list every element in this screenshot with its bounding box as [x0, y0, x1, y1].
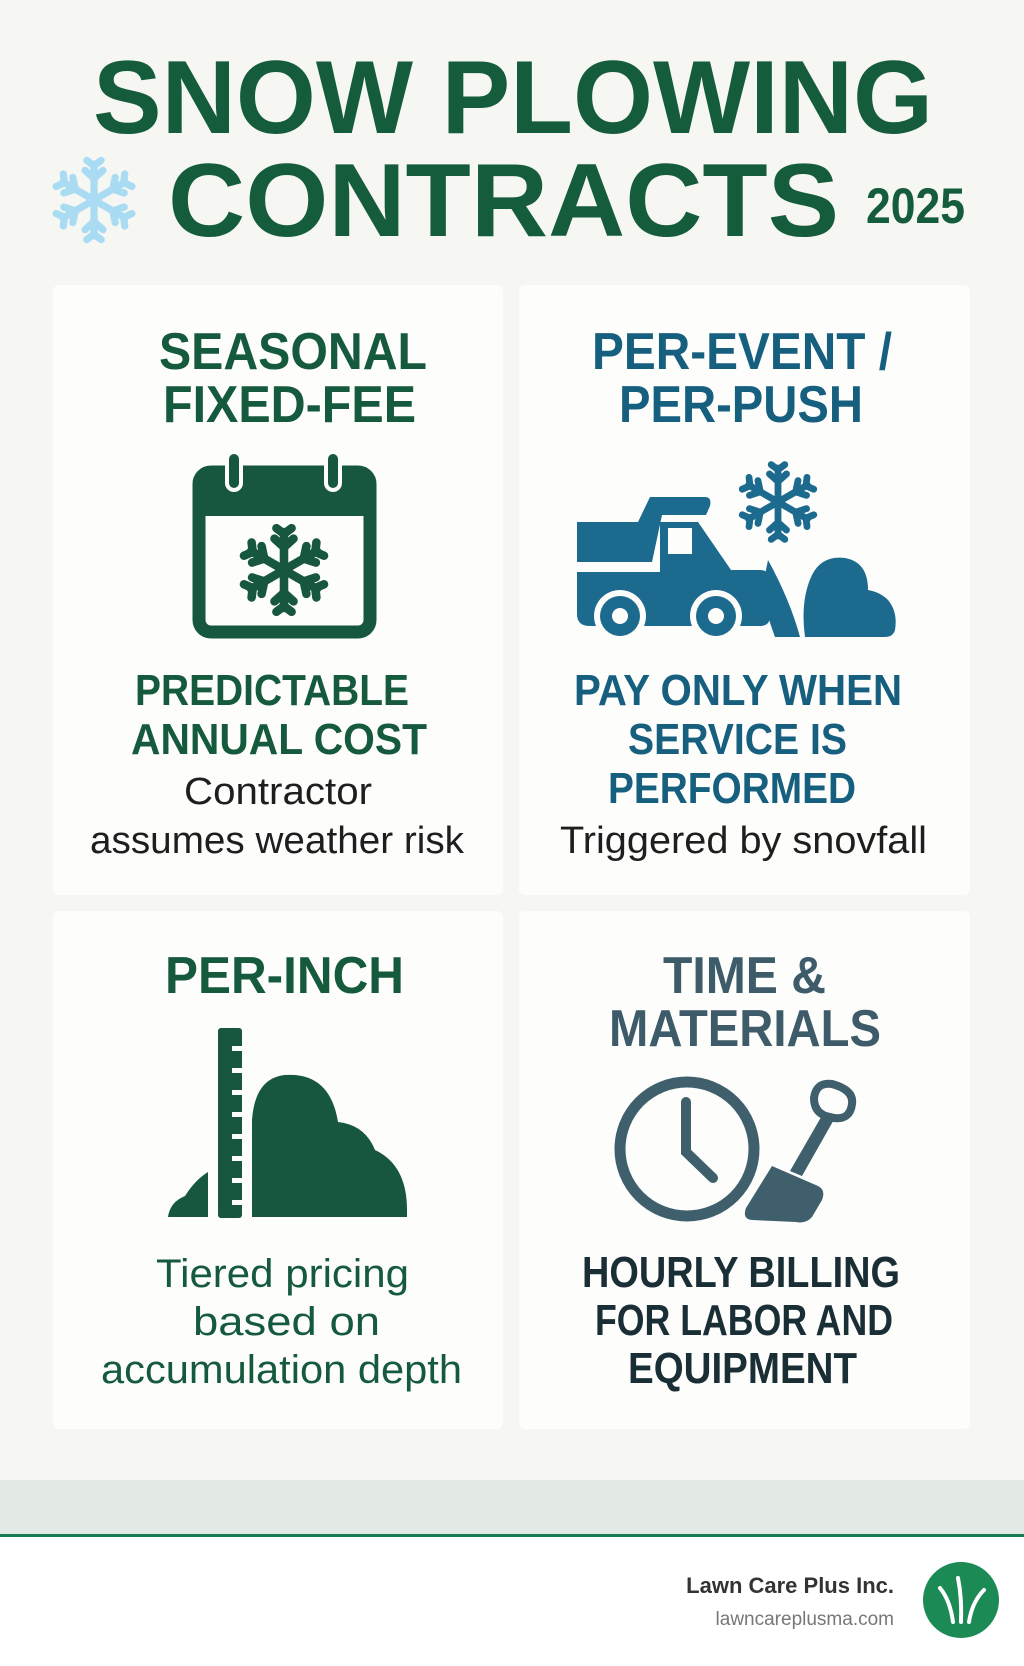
text block: PERFORMED — [608, 764, 856, 813]
heading — [609, 947, 881, 1058]
panel: seasonal fixed-fee: Contractor — [184, 771, 372, 813]
text block: HOURLY BILLING — [582, 1248, 900, 1297]
text block: accumulation depth — [101, 1348, 462, 1392]
title: 2025 — [866, 178, 965, 234]
panel: seasonal fixed-fee — [53, 285, 503, 895]
text block: FOR LABOR AND — [595, 1296, 893, 1345]
footer: company text — [686, 1573, 894, 1630]
heading: TIME & — [663, 947, 826, 1005]
heading: MATERIALS — [609, 1000, 881, 1058]
heading: FIXED-FEE — [163, 376, 416, 434]
logo — [923, 1562, 999, 1638]
heading: SEASONAL — [159, 323, 427, 381]
panel: per-event: Triggered by snovfall — [560, 820, 927, 862]
icon: title snowflake — [55, 160, 133, 240]
text block — [131, 666, 427, 764]
text block: SERVICE IS — [628, 715, 847, 764]
panel: per-event — [519, 285, 970, 895]
text block: EQUIPMENT — [628, 1344, 857, 1393]
title — [93, 40, 965, 259]
text block: Tiered pricing — [156, 1252, 409, 1296]
footer: company text: lawncareplusma.com — [716, 1609, 894, 1630]
heading — [592, 323, 892, 434]
text block: based on — [193, 1300, 380, 1344]
title: SNOW PLOWING — [93, 40, 933, 156]
text block — [101, 1252, 462, 1392]
heading: PER-PUSH — [619, 376, 863, 434]
text block: PAY ONLY WHEN — [574, 666, 902, 715]
heading — [159, 323, 427, 434]
panel: seasonal fixed-fee: assumes weather risk — [90, 820, 465, 862]
title: CONTRACTS — [168, 143, 839, 259]
icon: calendar — [199, 452, 370, 632]
text block: ANNUAL COST — [131, 715, 427, 764]
heading: PER-INCH — [165, 947, 404, 1005]
text block — [582, 1248, 900, 1393]
panel: time & materials — [519, 911, 970, 1429]
heading: PER-EVENT / — [592, 323, 892, 381]
icon: ruler and snow — [168, 1028, 407, 1218]
text block: PREDICTABLE — [135, 666, 409, 715]
icon: clock and shovel — [620, 1082, 852, 1222]
icon: plow truck — [577, 465, 896, 642]
footer band — [0, 1480, 1024, 1535]
text block — [574, 666, 902, 813]
footer: company text: Lawn Care Plus Inc. — [686, 1573, 894, 1598]
panel: per-inch — [53, 911, 503, 1429]
